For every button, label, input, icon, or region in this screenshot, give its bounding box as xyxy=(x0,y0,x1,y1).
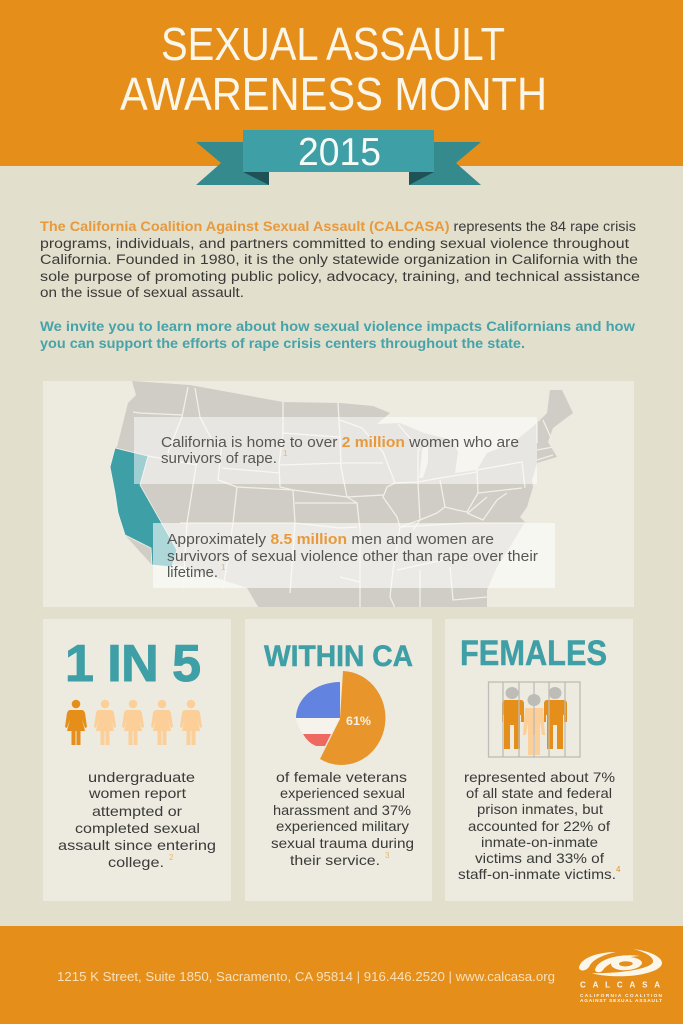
California highlight xyxy=(110,448,177,567)
callout: 8.5 million survivors: 1 xyxy=(221,563,226,572)
intro paragraph: California. Founded in 1980, it is the only statewide organization in California with the xyxy=(40,252,638,267)
statistic text: female veterans xyxy=(271,769,414,868)
intro paragraph: The California Coalition Against Sexual Assault (CALCASA) represents the 84 rape crisis xyxy=(40,219,636,234)
callout: 2 million survivors of rape: survivors of rape. xyxy=(161,450,277,467)
heading: within CA: WITHIN CA xyxy=(264,640,413,673)
panel: within CA xyxy=(245,619,432,901)
title: AWARENESS MONTH xyxy=(120,68,547,120)
icon: inmates behind bars xyxy=(488,682,580,757)
panel: females xyxy=(445,619,633,901)
pie chart: 61% xyxy=(296,671,385,765)
callout: 8.5 million survivors: lifetime. xyxy=(167,564,218,581)
statistic text: female veterans: of female veterans xyxy=(276,769,407,785)
footer band xyxy=(0,926,683,1024)
invitation paragraph xyxy=(40,319,636,351)
statistic text: female inmates: represented about 7% xyxy=(464,769,615,785)
panel: 1 in 5 xyxy=(43,619,231,901)
title: SEXUAL ASSAULT xyxy=(161,18,505,70)
statistic text: female veterans: 3 xyxy=(385,851,390,860)
heading: females: FEMALES xyxy=(460,634,607,673)
intro paragraph: sole purpose of promoting public policy, advocacy, training, and technical assistance xyxy=(40,269,640,284)
statistic text: female inmates: 4 xyxy=(616,865,621,874)
header band xyxy=(0,0,683,166)
invitation paragraph: you can support the efforts of rape crisis centers throughout the state. xyxy=(40,336,525,351)
heading: 1 in 5: 1 IN 5 xyxy=(65,635,201,693)
statistic text: undergraduate women: 2 xyxy=(169,853,174,862)
CALCASA logo: AGAINST SEXUAL ASSAULT xyxy=(580,998,662,1004)
statistic text: female veterans: their service. xyxy=(290,852,380,868)
statistic text: female inmates: victims and 33% of xyxy=(475,850,604,866)
statistic text: female inmates xyxy=(458,769,621,882)
footer contact line: 1215 K Street, Suite 1850, Sacramento, CA 95814 | 916.446.2520 | www.calcasa.org xyxy=(57,970,555,984)
intro paragraph: on the issue of sexual assault. xyxy=(40,285,244,300)
statistic text: undergraduate women: attempted or xyxy=(92,803,182,819)
statistic text: female veterans: experienced sexual xyxy=(280,785,405,801)
statistic text: undergraduate women xyxy=(58,769,216,870)
statistic text: female inmates: staff-on-inmate victims. xyxy=(458,866,616,882)
CALCASA logo xyxy=(579,949,663,1004)
ribbon banner: 2015: 2015 xyxy=(298,131,381,174)
statistic text: undergraduate women: college. xyxy=(108,854,164,870)
CALCASA logo: CALIFORNIA COALITION xyxy=(580,993,663,999)
statistic text: undergraduate women: undergraduate xyxy=(88,769,195,785)
statistic text: female veterans: sexual trauma during xyxy=(271,835,414,851)
statistic text: female inmates: prison inmates, but xyxy=(477,801,603,817)
map of United States xyxy=(110,381,573,610)
intro paragraph: programs, individuals, and partners committed to ending sexual violence throughout xyxy=(40,236,629,251)
pie chart: 61%: 61% xyxy=(346,716,371,728)
callout: 8.5 million survivors xyxy=(153,523,555,588)
statistic text: undergraduate women: completed sexual xyxy=(75,820,200,836)
statistic text: female veterans: harassment and 37% xyxy=(273,802,411,818)
panel: US map xyxy=(43,381,634,610)
callout: 2 million survivors of rape: 1 xyxy=(283,449,288,458)
callout: 2 million survivors of rape xyxy=(134,417,537,484)
callout: 8.5 million survivors: Approximately 8.5 million men and women are xyxy=(167,531,494,548)
statistic text: undergraduate women: assault since entering xyxy=(58,837,216,853)
invitation paragraph: We invite you to learn more about how sexual violence impacts Californians and how xyxy=(40,319,636,334)
title xyxy=(120,18,547,120)
ribbon banner: 2015 xyxy=(196,130,481,185)
intro paragraph xyxy=(40,219,640,300)
statistic text: female inmates: of all state and federal xyxy=(466,785,612,801)
icon: five women, one highlighted xyxy=(65,700,202,745)
statistic text: female inmates: inmate-on-inmate xyxy=(481,834,598,850)
statistic text: undergraduate women: women report xyxy=(88,785,186,801)
callout: 8.5 million survivors: survivors of sexual violence other than rape over their xyxy=(167,548,538,565)
statistic text: female inmates: accounted for 22% of xyxy=(468,818,610,834)
statistic text: female veterans: experienced military xyxy=(276,818,409,834)
callout: 2 million survivors of rape: California is home to over 2 million women who are xyxy=(161,434,519,451)
CALCASA logo: CALCASA xyxy=(580,980,660,990)
